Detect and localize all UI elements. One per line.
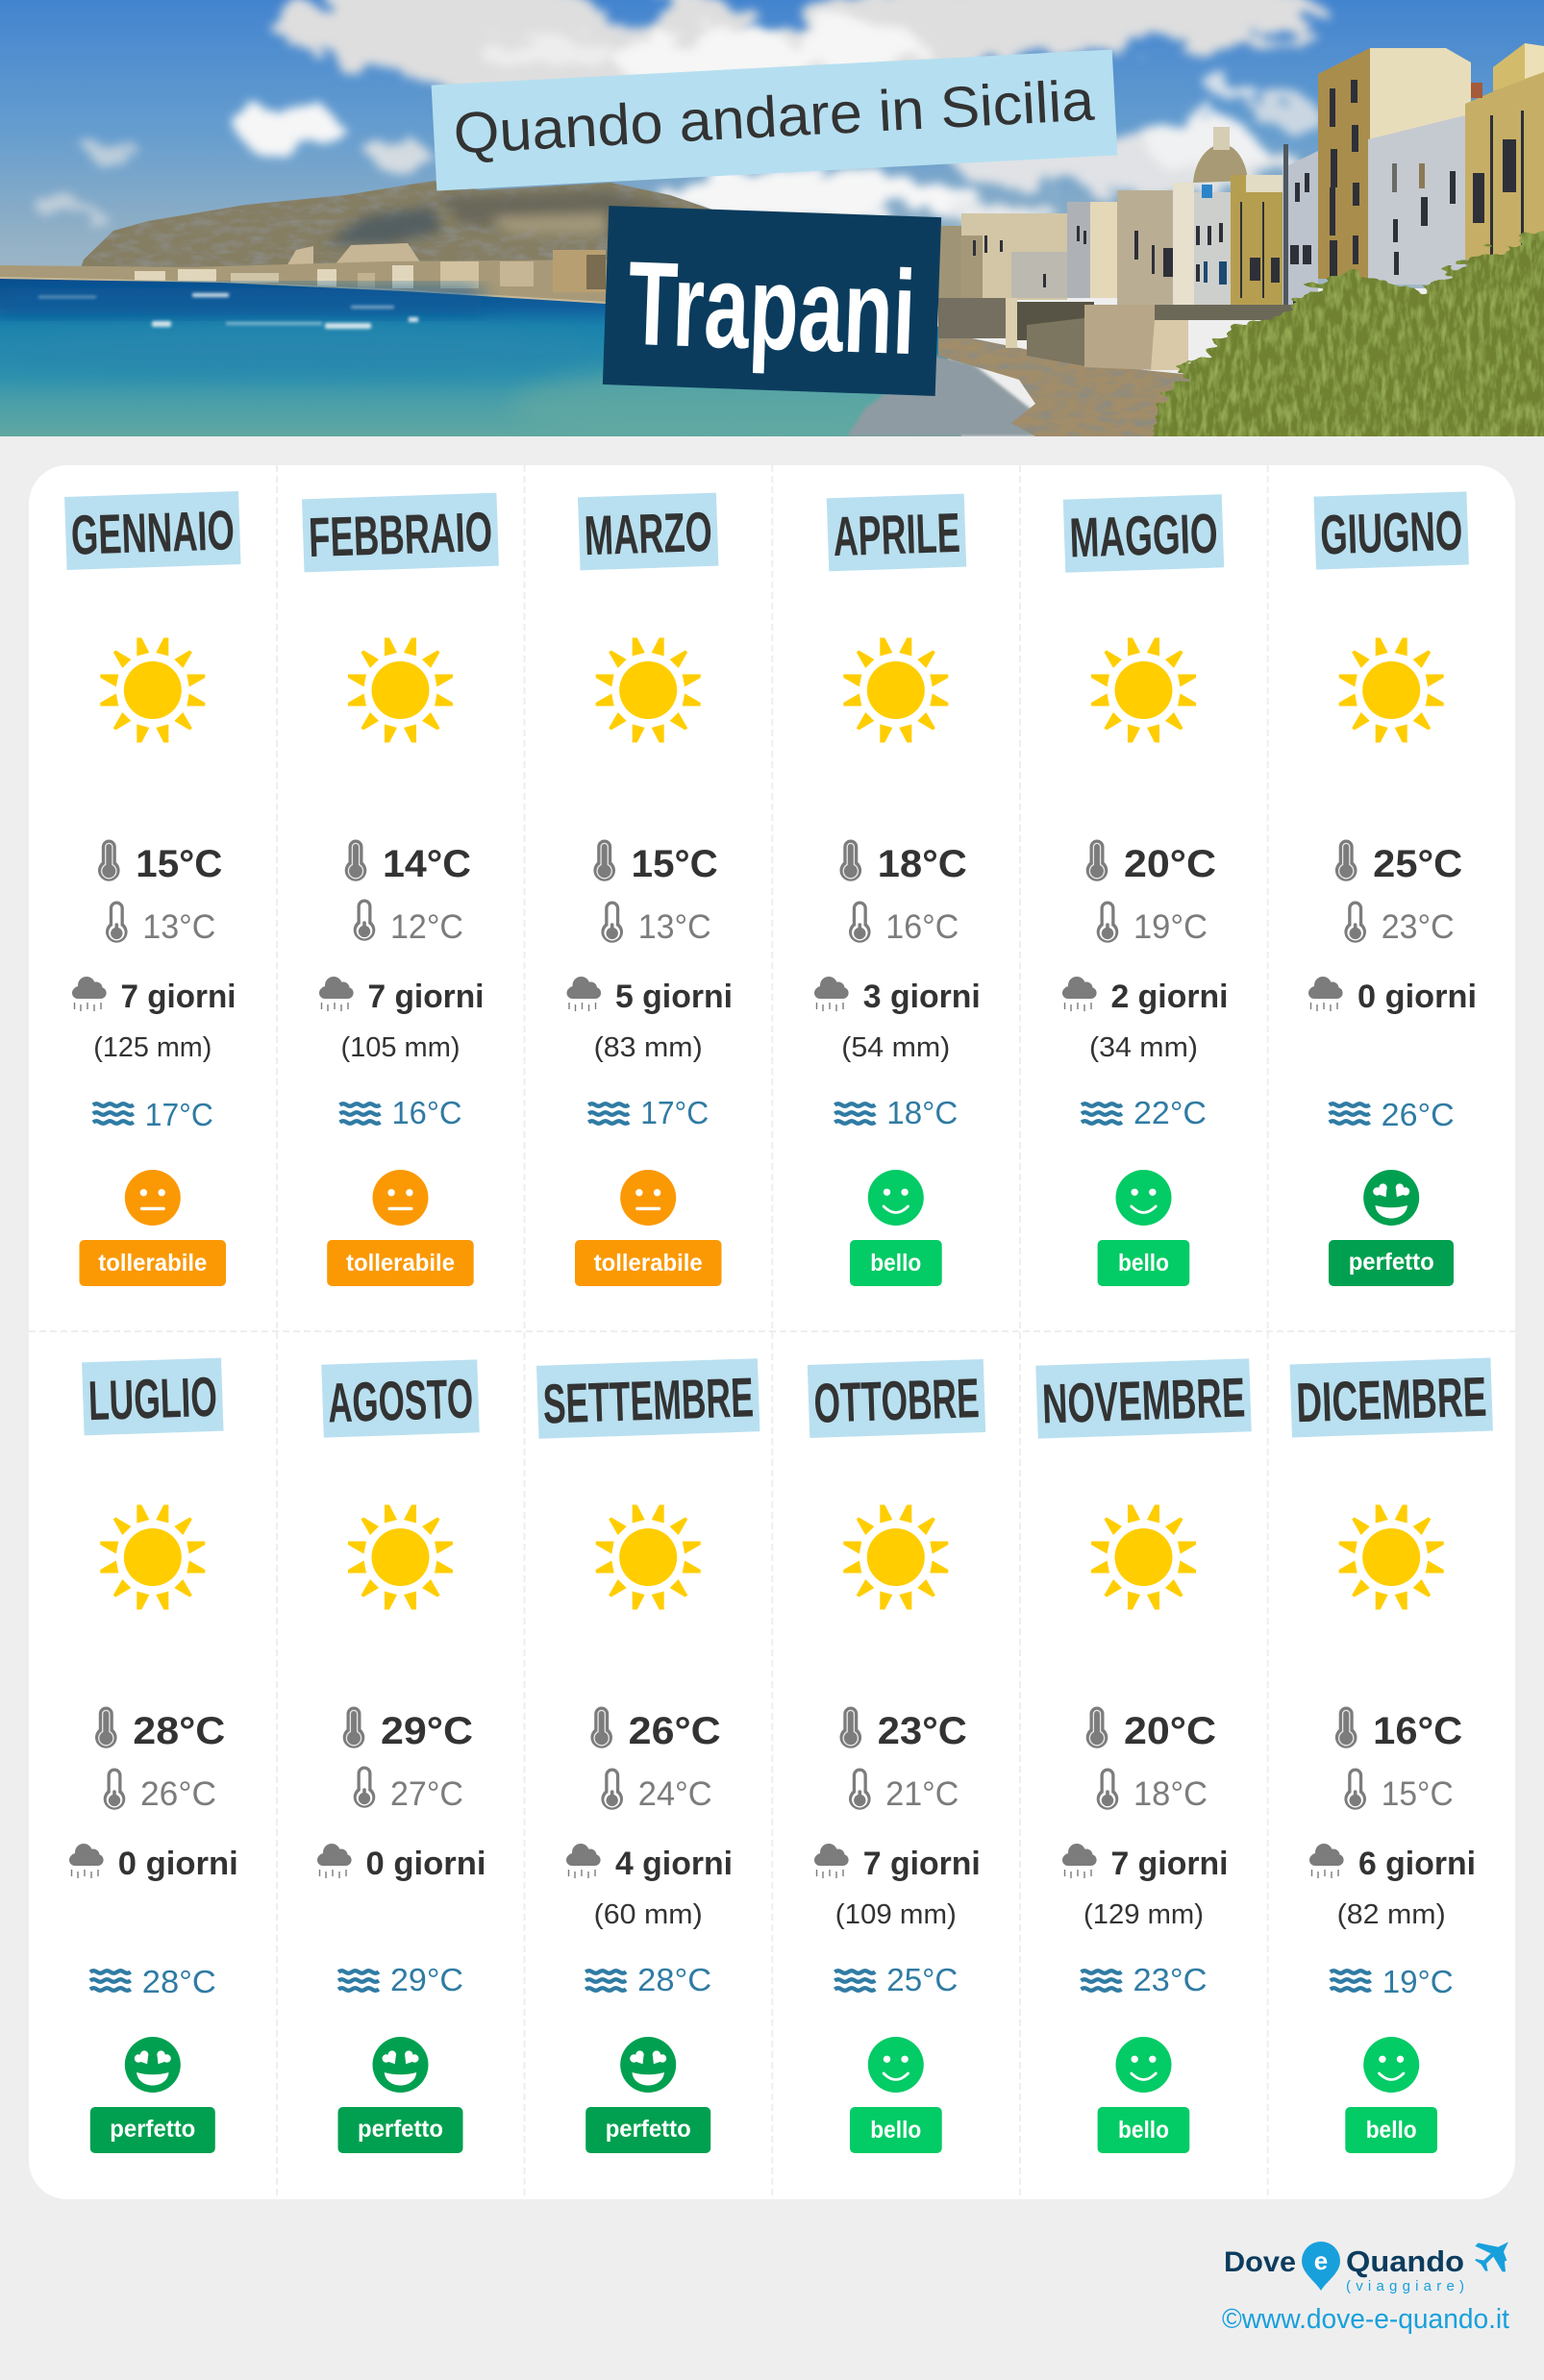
min temperature: 18°C	[1133, 1775, 1208, 1813]
rainy days: 0 giorni	[1357, 979, 1477, 1015]
panel: Gennaio	[64, 491, 241, 1286]
icon: rating face	[1363, 2037, 1419, 2093]
rainy days: 7 giorni	[863, 1846, 981, 1882]
month label: GENNAIO	[70, 499, 236, 567]
icon: rating face	[868, 1170, 924, 1226]
month label: SETTEMBRE	[542, 1366, 755, 1436]
month label: GIUGNO	[1319, 500, 1463, 566]
rainy days: 0 giorni	[118, 1846, 238, 1882]
icon: sea waves	[90, 1971, 131, 1991]
icon: min temperature	[849, 902, 871, 943]
icon: rating face	[1115, 2037, 1171, 2093]
icon: min temperature	[849, 1769, 871, 1810]
sea temperature: 16°C	[392, 1095, 461, 1130]
icon: map pin: e	[1314, 2246, 1328, 2275]
min temperature: 26°C	[140, 1775, 216, 1813]
rainy days: 2 giorni	[1111, 979, 1229, 1015]
panel: Aprile	[814, 494, 981, 1286]
icon: max temperature	[1335, 840, 1357, 881]
rainfall: (34 mm)	[1089, 1032, 1198, 1063]
icon: sun	[596, 638, 701, 742]
sea temperature: 28°C	[637, 1962, 711, 1997]
icon: max temperature	[343, 1707, 364, 1748]
icon: min temperature	[354, 900, 375, 941]
rating badge	[575, 1240, 721, 1286]
icon: rain cloud	[1308, 977, 1343, 1011]
icon: sea waves	[1081, 1971, 1121, 1991]
month label	[578, 493, 718, 570]
seafront buildings	[938, 43, 1544, 306]
rainy days: 4 giorni	[615, 1846, 733, 1882]
month label: MARZO	[584, 501, 713, 567]
rating badge	[79, 1240, 226, 1286]
rating badge: perfetto	[358, 2116, 443, 2143]
icon: rain cloud	[814, 1844, 849, 1878]
logo: Dove e Quando: Dove	[1224, 2246, 1296, 2278]
icon: min temperature	[1097, 1769, 1118, 1810]
month label: LUGLIO	[87, 1366, 218, 1432]
month label	[536, 1358, 760, 1439]
icon: max temperature	[1086, 1707, 1108, 1748]
rainy days: 0 giorni	[365, 1846, 486, 1882]
icon: min temperature	[601, 902, 623, 943]
green bushes	[1153, 231, 1544, 436]
icon: sun	[348, 1505, 453, 1609]
rainy days: 7 giorni	[1111, 1846, 1229, 1882]
sea temperature: 19°C	[1382, 1964, 1454, 1999]
panel: Agosto	[317, 1359, 486, 2153]
icon: sun	[1091, 638, 1196, 742]
icon: sea waves	[340, 1103, 381, 1124]
rating badge: perfetto	[110, 2116, 195, 2143]
rating badge	[338, 2107, 463, 2153]
month label	[321, 1359, 480, 1438]
icon: sun	[1091, 1505, 1196, 1609]
panel: Novembre	[1035, 1358, 1252, 2153]
icon: rain cloud	[317, 1844, 352, 1878]
panel: Dicembre	[1289, 1358, 1493, 2153]
city title: Trapani	[603, 206, 941, 396]
max temperature: 25°C	[1373, 843, 1462, 885]
max temperature: 15°C	[632, 843, 718, 885]
icon: rating face	[620, 1170, 676, 1226]
icon: rain cloud	[1062, 977, 1097, 1011]
icon: max temperature	[345, 840, 366, 881]
icon: rain cloud	[1062, 1844, 1097, 1878]
icon: sun	[596, 1505, 701, 1609]
sea wall	[938, 298, 1308, 370]
icon: max temperature	[1086, 840, 1108, 881]
icon: rating face	[620, 2037, 676, 2093]
month label	[1035, 1358, 1252, 1439]
header photo: Trapani seafront	[0, 0, 1544, 461]
sea temperature: 28°C	[142, 1964, 216, 1999]
max temperature: 16°C	[1373, 1710, 1462, 1752]
website credit: ©www.dove-e-quando.it	[1222, 2304, 1509, 2335]
icon: sea waves	[338, 1971, 379, 1991]
rainy days: 7 giorni	[121, 979, 237, 1015]
rocky shore	[938, 332, 1192, 436]
max temperature: 15°C	[136, 843, 222, 885]
min temperature: 23°C	[1382, 908, 1455, 946]
rating badge	[90, 2107, 215, 2153]
icon: rain cloud	[69, 1844, 104, 1878]
sea temperature: 26°C	[1382, 1097, 1455, 1132]
rating badge: tollerabile	[346, 1250, 455, 1277]
month label: NOVEMBRE	[1041, 1367, 1246, 1435]
icon: rating face	[1115, 1170, 1171, 1226]
distant town	[0, 250, 615, 308]
month label: APRILE	[833, 502, 961, 568]
icon: min temperature	[1344, 1769, 1366, 1810]
rating badge	[850, 1240, 942, 1286]
icon: map pin	[1302, 2242, 1340, 2291]
rating badge: perfetto	[1349, 1249, 1434, 1276]
rating badge: bello	[1118, 2117, 1169, 2144]
icon: rating face	[125, 1170, 181, 1226]
title badge: Quando andare in Sicilia: Quando andare in Sicilia	[452, 68, 1096, 165]
rating badge: bello	[1118, 1250, 1169, 1277]
min temperature: 21°C	[885, 1775, 959, 1813]
logo: Dove e Quando	[1224, 2242, 1508, 2294]
rainy days: 5 giorni	[615, 979, 733, 1015]
rating badge	[850, 2107, 942, 2153]
rainfall: (82 mm)	[1337, 1899, 1446, 1930]
month label: FEBBRAIO	[308, 501, 493, 569]
rainfall: (83 mm)	[594, 1032, 703, 1063]
min temperature: 27°C	[390, 1775, 463, 1813]
icon: min temperature	[1097, 902, 1118, 943]
rainfall: (129 mm)	[1083, 1899, 1204, 1930]
rating badge	[327, 1240, 474, 1286]
sea temperature: 17°C	[145, 1097, 213, 1132]
month label	[82, 1358, 224, 1435]
month label	[827, 494, 966, 571]
icon: min temperature	[104, 1769, 125, 1810]
icon: rain cloud	[1309, 1844, 1344, 1878]
calendar card	[29, 465, 1515, 2199]
icon: sun	[843, 1505, 948, 1609]
month label	[1313, 491, 1469, 570]
sea temperature: 17°C	[640, 1095, 709, 1130]
sea temperature: 22°C	[1133, 1095, 1207, 1130]
icon: sea waves	[588, 1103, 629, 1124]
max temperature: 20°C	[1124, 1710, 1216, 1752]
icon: min temperature	[106, 902, 128, 943]
month label	[302, 493, 499, 572]
min temperature: 13°C	[142, 908, 215, 946]
icon: rain cloud	[72, 977, 107, 1011]
rating badge: tollerabile	[594, 1250, 703, 1277]
icon: max temperature	[590, 1707, 612, 1748]
rating badge	[1345, 2107, 1437, 2153]
icon: rain cloud	[319, 977, 354, 1011]
month label	[1063, 494, 1224, 573]
rating badge	[585, 2107, 710, 2153]
icon: sun	[843, 638, 948, 742]
icon: min temperature	[1344, 902, 1366, 943]
icon: sea waves	[834, 1103, 875, 1124]
month label	[64, 491, 241, 570]
rating badge	[1098, 1240, 1189, 1286]
rating badge	[1098, 2107, 1189, 2153]
icon: rain cloud	[567, 977, 601, 1011]
min temperature: 15°C	[1382, 1775, 1454, 1813]
max temperature: 28°C	[133, 1710, 225, 1752]
icon: sea waves	[1330, 1103, 1370, 1124]
sea temperature: 18°C	[886, 1095, 958, 1130]
icon: rain cloud	[814, 977, 849, 1011]
icon: sun	[1339, 1505, 1444, 1609]
rainfall: (105 mm)	[340, 1032, 460, 1063]
min temperature: 24°C	[638, 1775, 712, 1813]
rating badge: bello	[870, 1250, 921, 1277]
rainfall: (109 mm)	[835, 1899, 957, 1930]
max temperature: 23°C	[878, 1710, 967, 1752]
icon: sea waves	[93, 1103, 134, 1124]
rainy days: 7 giorni	[367, 979, 485, 1015]
rainfall: (54 mm)	[841, 1032, 950, 1063]
sea temperature: 25°C	[886, 1962, 958, 1997]
logo: Dove e Quando: Quando	[1346, 2244, 1464, 2278]
rainy days: 3 giorni	[863, 979, 981, 1015]
month label: AGOSTO	[327, 1368, 474, 1434]
max temperature: 14°C	[383, 843, 471, 885]
rainy days: 6 giorni	[1358, 1846, 1476, 1882]
max temperature: 26°C	[629, 1710, 721, 1752]
icon: max temperature	[95, 1707, 117, 1748]
icon: sea waves	[834, 1971, 875, 1991]
min temperature: 12°C	[390, 908, 463, 946]
rating badge: perfetto	[606, 2116, 691, 2143]
icon: min temperature	[354, 1767, 375, 1808]
panel: Maggio	[1062, 494, 1229, 1286]
max temperature: 20°C	[1124, 843, 1216, 885]
icon: rating face	[1363, 1170, 1419, 1226]
panel: Febbraio	[302, 493, 499, 1286]
icon: sun	[348, 638, 453, 742]
sea temperature: 29°C	[390, 1962, 463, 1997]
sea	[0, 279, 1036, 451]
icon: max temperature	[593, 840, 615, 881]
rating badge: bello	[870, 2117, 921, 2144]
panel: Settembre	[536, 1358, 760, 2153]
icon: rating face	[373, 1170, 429, 1226]
month label	[808, 1359, 985, 1438]
panel: Giugno	[1308, 491, 1477, 1286]
panel: Marzo	[567, 493, 733, 1286]
icon: max temperature	[1335, 1707, 1357, 1748]
rainfall: (125 mm)	[93, 1032, 212, 1063]
icon: sea waves	[1082, 1103, 1122, 1124]
icon: plane	[1475, 2242, 1508, 2271]
min temperature: 13°C	[638, 908, 711, 946]
month label: MAGGIO	[1069, 502, 1219, 570]
panel: Ottobre	[808, 1359, 985, 2153]
icon: rating face	[868, 2037, 924, 2093]
rainfall: (60 mm)	[594, 1899, 703, 1930]
icon: sun	[100, 638, 205, 742]
rating badge	[1329, 1240, 1454, 1286]
min temperature: 19°C	[1133, 908, 1208, 946]
icon: sea waves	[585, 1971, 626, 1991]
icon: rain cloud	[566, 1844, 601, 1878]
max temperature: 29°C	[381, 1710, 473, 1752]
icon: max temperature	[98, 840, 120, 881]
logo: Dove e Quando: (viaggiare)	[1346, 2278, 1464, 2294]
month label: OTTOBRE	[813, 1367, 981, 1435]
icon: min temperature	[601, 1769, 623, 1810]
city title: Trapani: Trapani	[626, 237, 918, 380]
max temperature: 18°C	[878, 843, 967, 885]
title badge: Quando andare in Sicilia	[432, 49, 1117, 190]
min temperature: 16°C	[885, 908, 959, 946]
sea temperature: 23°C	[1133, 1962, 1208, 1997]
icon: sun	[1339, 638, 1444, 742]
rating badge: bello	[1366, 2117, 1417, 2144]
icon: rating face	[125, 2037, 181, 2093]
icon: rating face	[373, 2037, 429, 2093]
distant mountain	[81, 181, 711, 267]
panel: Luglio	[69, 1358, 238, 2153]
icon: sun	[100, 1505, 205, 1609]
icon: sea waves	[1331, 1971, 1371, 1991]
icon: max temperature	[840, 840, 861, 881]
rating badge: tollerabile	[98, 1250, 207, 1277]
icon: max temperature	[840, 1707, 861, 1748]
